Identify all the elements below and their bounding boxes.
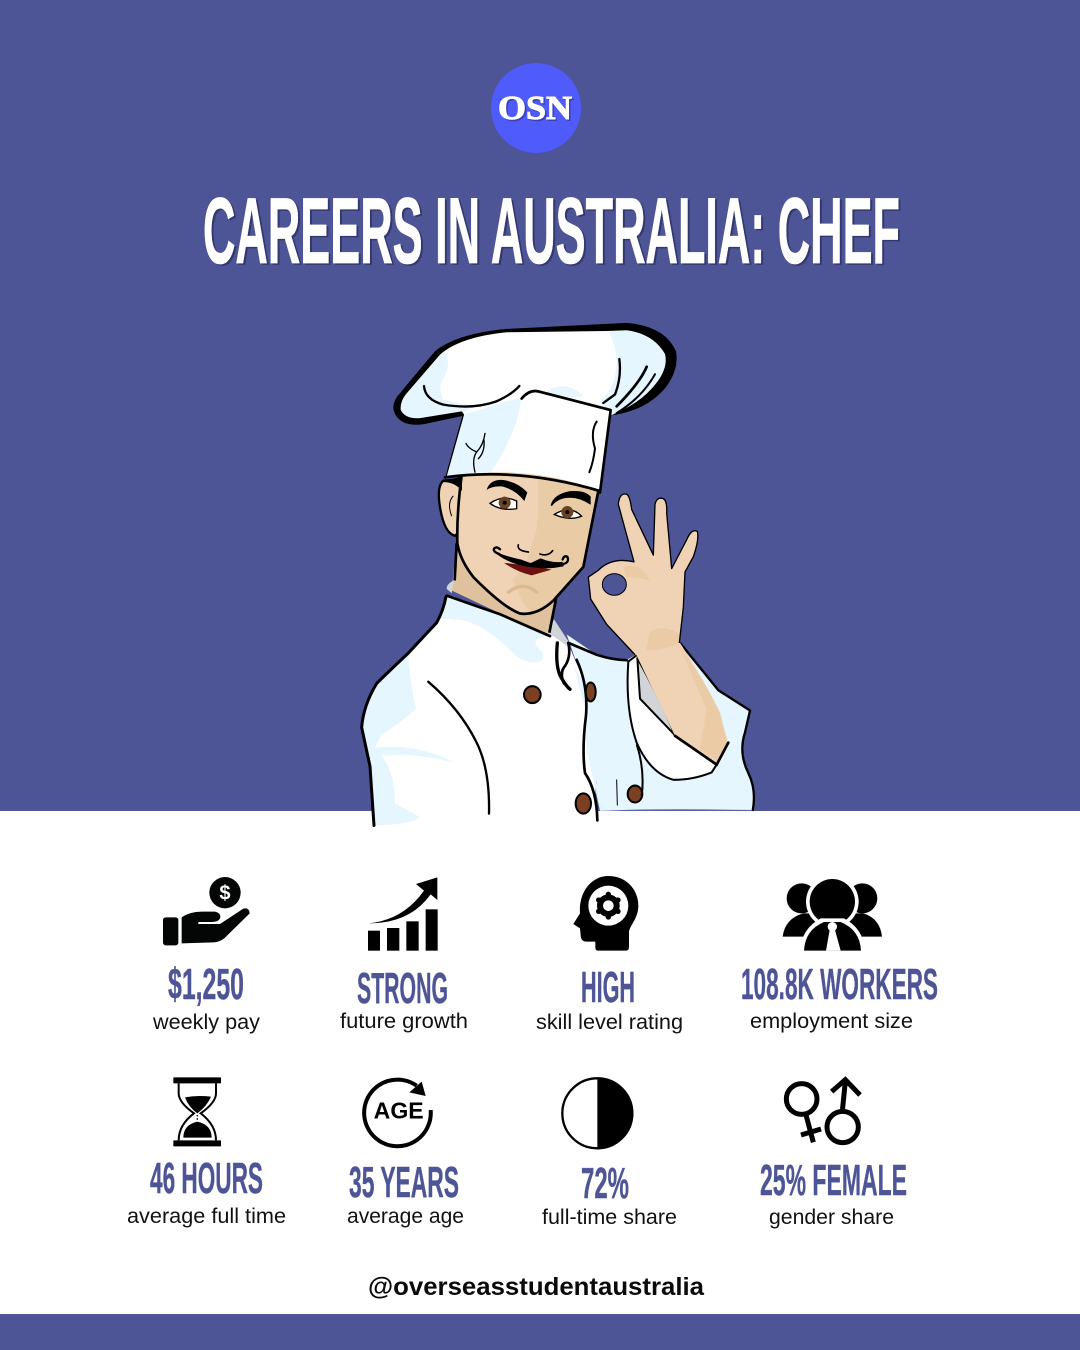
sleeve outline <box>680 643 754 811</box>
stat: employment size <box>741 875 938 1033</box>
top background panel <box>0 0 1080 811</box>
cuff inner <box>637 658 675 735</box>
hat band <box>445 391 611 491</box>
label: full-time share <box>542 1206 677 1229</box>
icon: group of workers <box>783 875 882 951</box>
forearm shading <box>680 648 728 761</box>
nose <box>518 545 553 555</box>
jacket buttons <box>524 682 642 814</box>
hair wedge <box>440 476 462 491</box>
value: 72% <box>581 1159 629 1208</box>
label: employment size <box>750 1010 913 1033</box>
label: average full time <box>127 1205 286 1228</box>
value: 35 YEARS <box>349 1158 459 1207</box>
hat top outline <box>393 323 677 425</box>
cuff <box>628 655 717 780</box>
face outline <box>455 476 598 633</box>
logo: OSN badge: OSN <box>498 90 572 127</box>
hat band shading <box>445 397 522 477</box>
bottom band <box>0 1314 1080 1350</box>
ear detail <box>450 496 453 516</box>
label: average age <box>347 1205 464 1228</box>
jacket shading <box>362 597 607 825</box>
stat: skill level <box>536 876 683 1034</box>
stat: skill level: HIGH <box>581 963 635 1012</box>
collar grey <box>447 580 570 675</box>
hat folds <box>424 359 655 413</box>
eyes <box>490 497 582 518</box>
label: weekly pay <box>152 1011 261 1034</box>
label: skill level rating <box>536 1011 683 1034</box>
icon: half-filled circle <box>562 1077 633 1149</box>
icon: rising bar chart <box>368 877 438 951</box>
icon: hand holding coin: $ <box>219 883 231 905</box>
label: gender share <box>769 1206 894 1229</box>
stat: full-time share <box>542 1077 677 1229</box>
right sleeve <box>567 634 754 811</box>
icon: age cycle <box>364 1080 431 1146</box>
forearm <box>636 643 728 764</box>
neck <box>452 540 557 636</box>
stat: average age <box>347 1080 464 1228</box>
ear <box>439 479 462 536</box>
sleeve fold <box>637 744 643 797</box>
jacket outlines <box>362 596 627 825</box>
illustration: chef giving OK sign <box>362 323 754 825</box>
forearm outline <box>675 736 728 765</box>
icon: head with gear <box>573 876 638 951</box>
hat top <box>395 324 676 423</box>
face shading <box>513 469 598 613</box>
logo: OSN badge <box>491 63 581 153</box>
eyebrows <box>487 480 591 506</box>
logo: OSN badge: OSN <box>500 92 574 128</box>
hat top shading <box>397 325 674 422</box>
value: $1,250 <box>168 960 244 1009</box>
value: 25% FEMALE <box>760 1156 907 1205</box>
icon: hourglass <box>173 1077 221 1146</box>
icon: gender symbols <box>786 1080 860 1143</box>
moustache <box>494 547 568 567</box>
stat: future growth: STRONG <box>357 964 448 1013</box>
stat: weekly pay <box>152 877 261 1034</box>
stat: future growth <box>340 877 468 1033</box>
stat: average hours <box>127 1077 286 1228</box>
face <box>457 465 598 614</box>
label: future growth <box>340 1010 468 1033</box>
lips <box>504 563 552 575</box>
value: 46 HOURS <box>150 1154 263 1203</box>
hand <box>588 494 698 655</box>
chin <box>508 586 537 592</box>
hat band outline <box>445 391 611 493</box>
stat: gender share <box>760 1080 907 1229</box>
icon: hand holding coin <box>163 877 250 945</box>
jacket body <box>362 596 597 825</box>
icon: age cycle: AGE <box>374 1097 424 1123</box>
sleeve base line <box>600 809 752 811</box>
footer handle: @overseasstudentaustralia <box>368 1273 705 1301</box>
